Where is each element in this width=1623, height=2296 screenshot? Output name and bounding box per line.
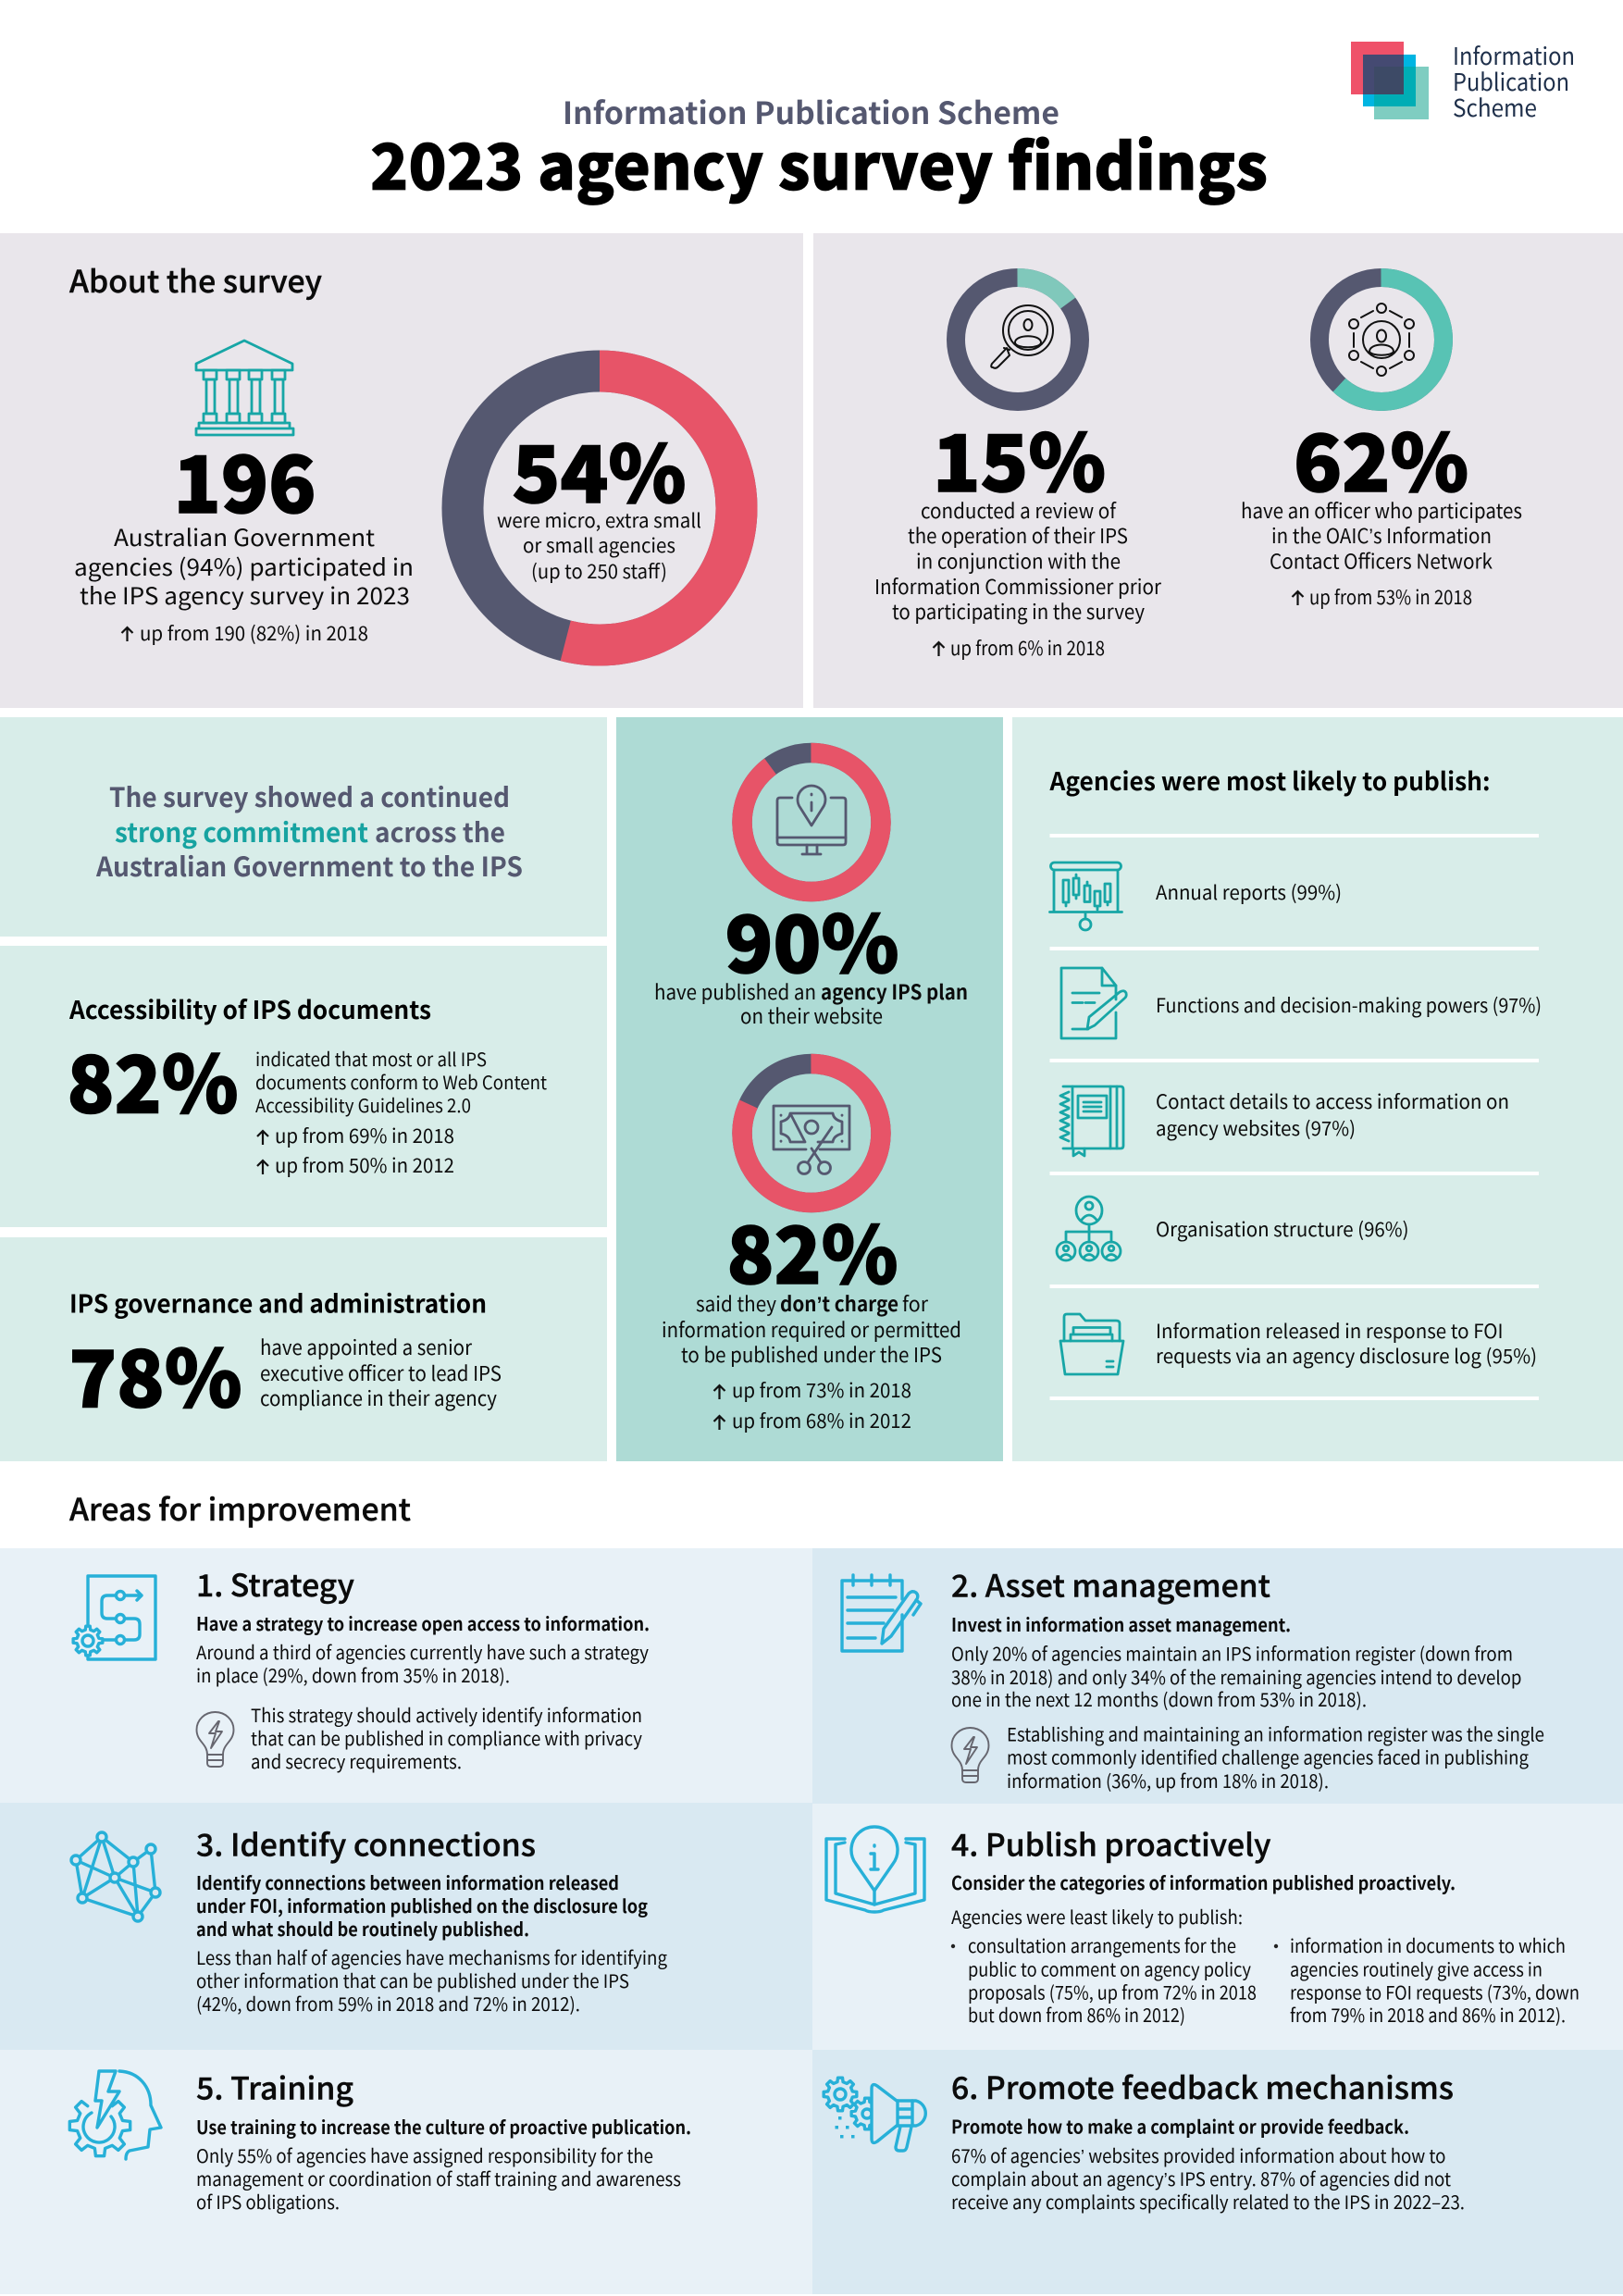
bullet list: consultation arrangements: proposals (75%, up from 72% in 2018 [968, 1979, 1257, 2004]
icon: notepad and pencil [842, 1575, 921, 1651]
stat: 15%: up from 6% in 2018 [950, 634, 1105, 662]
bullet list: information in documents: response to FOI requests (73%, down [1290, 1979, 1580, 2004]
bullet list: consultation arrangements: but down from 86% in 2012) [968, 2001, 1185, 2028]
icon: megaphone and gears [824, 2078, 925, 2151]
stat: 196 agencies: 196 [174, 422, 316, 536]
panel: 4. publish proactively: Agencies were least likely to publish: [951, 1903, 1243, 1930]
stat: 90% [654, 882, 968, 1030]
panel: 6. promote feedback mechanisms: 6. Promote feedback mechanisms [951, 2064, 1454, 2108]
panel: 3. identify connections: Less than half of agencies have mechanisms for identifying [196, 1943, 667, 1970]
panel: accessibility of IPS documents [0, 946, 607, 1227]
stat: 15%: the operation of their IPS [908, 520, 1128, 550]
icon: document and pen [1061, 968, 1126, 1038]
list item: organisation structure: Organisation structure (96%) [1156, 1215, 1408, 1243]
panel: accessibility of IPS documents: 82% [67, 1022, 239, 1136]
list item: information released: Information released in response to FOI [1156, 1317, 1503, 1345]
panel: IPS governance and administration: have appointed a senior [260, 1332, 472, 1361]
icon: magnifier with person [991, 305, 1053, 368]
icon: strategy path and gear [73, 1576, 155, 1659]
stat: 62%: have an officer who participates [1241, 495, 1522, 525]
donut chart: 82% [742, 1064, 881, 1203]
heading: areas for improvement: Areas for improvement [69, 1485, 411, 1530]
stat: 82%: to be published under the IPS [681, 1339, 942, 1369]
donut chart: 54%: (up to 250 staff) [531, 557, 667, 585]
stat: 196 agencies: Australian Government [114, 520, 376, 553]
logo: Scheme [1453, 90, 1537, 124]
stat: 82%: 82% [727, 1193, 898, 1307]
stat: 15%: in conjunction with the [916, 546, 1121, 576]
stat: 90%: have published an [654, 976, 816, 1006]
donut chart: 54%: or small agencies [523, 531, 675, 559]
panel: accessibility of IPS documents: documents conform to Web Content [255, 1068, 547, 1095]
stat: 62%: 62% [1294, 401, 1468, 515]
donut chart: 15% [956, 278, 1080, 402]
stat: 62% [1241, 401, 1522, 611]
panel: IPS governance and administration: 78% [68, 1316, 242, 1431]
stat: 15% [874, 401, 1161, 662]
icon: notebook [1060, 1086, 1123, 1156]
stat: 90%: on their website [740, 1000, 883, 1030]
stat: 82%: said they [696, 1288, 776, 1318]
panel: 1. strategy: 1. Strategy [196, 1561, 354, 1606]
list item: contact details: Contact details to access information on [1156, 1087, 1509, 1115]
panel: 3. identify connections [0, 1803, 812, 2050]
icon: light bulb [951, 1728, 988, 1782]
icon: light bulb [196, 1712, 233, 1767]
list item: annual reports: Annual reports (99%) [1156, 878, 1342, 906]
panel: 5. training: Use training to increase the culture of proactive publication. [196, 2113, 691, 2140]
icon: banknote and scissors [774, 1106, 849, 1173]
stat: 15%: to participating in the survey [892, 596, 1145, 626]
stat: 82%: up from 68% in 2012 [732, 1407, 911, 1434]
donut chart: 54%: were micro, extra small [497, 506, 701, 534]
list item: contact details [1156, 1087, 1509, 1142]
stat: 15%: conducted a review of [921, 495, 1117, 525]
panel: 6. promote feedback mechanisms: complain about an agency’s IPS entry. 87% of agencies did not [951, 2165, 1451, 2191]
stat: 82%: up from 73% in 2018 [732, 1376, 911, 1404]
icon: government building [196, 341, 293, 435]
dots [835, 2116, 855, 2138]
panel: strong commitment statement: Australian Government to the IPS [95, 846, 523, 885]
panel: 1. strategy: Around a third of agencies currently have such a strategy [196, 1638, 650, 1665]
stat: 90%: 90% [725, 882, 899, 996]
panel: 3. identify connections: under FOI, information published on the disclosure log [196, 1892, 648, 1918]
stat: 90%: agency IPS plan [821, 976, 968, 1006]
icon: network with person [1349, 304, 1414, 376]
panel: 3. identify connections: (42%, down from 59% in 2018 and 72% in 2012). [196, 1990, 580, 2017]
panel: 5. training: of IPS obligations. [196, 2188, 340, 2215]
callout: strategy: that can be published in compliance with privacy [251, 1724, 643, 1751]
list item: contact details: agency websites (97%) [1156, 1114, 1356, 1142]
callout: strategy: This strategy should actively identify information [251, 1701, 642, 1728]
donut chart: 54% [463, 371, 737, 645]
bullet list: consultation arrangements: public to comment on agency policy [968, 1955, 1252, 1982]
panel: agencies most likely to publish [1012, 717, 1623, 1461]
panel: IPS governance and administration: IPS governance and administration [69, 1285, 487, 1320]
panel: accessibility of IPS documents: Accessibility of IPS documents [68, 990, 431, 1026]
subtitle: Information Publication Scheme [563, 89, 1059, 133]
list item: information released [1156, 1317, 1537, 1370]
stat: 62%: up from 53% in 2018 [1309, 583, 1472, 611]
panel: 6. promote feedback mechanisms [812, 2050, 1623, 2294]
panel: accessibility of IPS documents: indicated that most or all IPS [255, 1045, 487, 1072]
panel: strong commitment statement [0, 717, 607, 937]
icon: presentation board [1049, 863, 1121, 930]
icon: connected network [71, 1832, 160, 1921]
stat: 15%: Information Commissioner prior [874, 571, 1161, 601]
panel: 6. promote feedback mechanisms: receive any complaints specifically related to the IPS in 2022–23. [951, 2188, 1465, 2215]
panel: 3. identify connections: other information that can be published under the IPS [196, 1967, 629, 1993]
callout: strategy [251, 1701, 643, 1774]
panel: accessibility of IPS documents: Accessibility Guidelines 2.0 [255, 1091, 471, 1118]
stat: 62%: Contact Officers Network [1270, 546, 1493, 576]
logo: Information [1453, 38, 1575, 72]
panel: 4. publish proactively [812, 1804, 1623, 2050]
panel: review and contact officers [813, 233, 1623, 708]
logo: Publication [1453, 64, 1569, 98]
bullet list: information in documents: information in documents to which [1290, 1931, 1566, 1958]
callout: information register: information (36%, up from 18% in 2018). [1007, 1767, 1329, 1793]
callout: information register: Establishing and maintaining an information register was the single [1007, 1719, 1544, 1747]
panel: IPS plan and charging [616, 717, 1003, 1461]
donut chart: 54%: 54% [513, 412, 687, 526]
callout: strategy: and secrecy requirements. [251, 1747, 462, 1774]
panel: IPS governance and administration: compliance in their agency [260, 1383, 497, 1412]
stat: 196 agencies: the IPS agency survey in 2023 [80, 578, 410, 612]
panel: 5. training: 5. Training [196, 2064, 353, 2108]
stat: 196 agencies: agencies (94%) participated in [74, 550, 414, 583]
icon: folder [1060, 1314, 1123, 1374]
stat: 82%: for [902, 1288, 928, 1318]
panel: 4. publish proactively: Consider the categories of information published proactively. [951, 1868, 1456, 1895]
stat: 62%: in the OAIC’s Information [1271, 520, 1492, 550]
heading: about the survey: About the survey [69, 257, 322, 302]
panel: 1. strategy [0, 1548, 812, 1803]
panel: 2. asset management [812, 1548, 1623, 1804]
callout: information register [1007, 1719, 1544, 1793]
list item: information released: requests via an agency disclosure log (95%) [1156, 1342, 1537, 1370]
panel: 1. strategy: in place (29%, down from 35% in 2018). [196, 1661, 510, 1688]
logo [1351, 38, 1575, 124]
list item: functions: Functions and decision-making powers (97%) [1156, 991, 1542, 1019]
panel: 2. asset management: 38% in 2018) and only 34% of the remaining agencies intend to develop [951, 1663, 1521, 1690]
panel: 3. identify connections: and what should be routinely published. [196, 1915, 529, 1942]
bullet list: information in documents [1274, 1931, 1580, 2028]
panel: 5. training: Only 55% of agencies have assigned responsibility for the [196, 2141, 653, 2168]
panel: 2. asset management: one in the next 12 months (down from 53% in 2018). [951, 1685, 1367, 1712]
panel: 4. publish proactively: 4. Publish proactively [951, 1821, 1271, 1866]
panel: 6. promote feedback mechanisms: 67% of agencies’ websites provided information about how to [951, 2141, 1445, 2168]
icon: open book with info pin [826, 1827, 924, 1912]
panel: 1. strategy: Have a strategy to increase open access to information. [196, 1609, 650, 1636]
bullet list: information in documents: agencies routinely give access in [1290, 1955, 1542, 1982]
panel: accessibility of IPS documents: up from 50% in 2012 [275, 1151, 454, 1179]
panel: IPS governance and administration [0, 1237, 607, 1461]
panel: 2. asset management: 2. Asset management [951, 1562, 1270, 1607]
panel: 3. identify connections: Identify connections between information released [196, 1868, 619, 1895]
panel: IPS governance and administration: executive officer to lead IPS [260, 1358, 502, 1387]
panel: about the survey [0, 233, 803, 708]
stat: 82% [662, 1193, 961, 1434]
panel: strong commitment statement: strong commitment [115, 812, 368, 850]
icon: monitor with info pin [777, 786, 846, 854]
icon: head, gear and lightning [69, 2071, 161, 2159]
stat: 15%: 15% [933, 401, 1106, 515]
stat: 82%: don’t charge [780, 1288, 898, 1318]
panel: 6. promote feedback mechanisms: Promote how to make a complaint or provide feedback. [951, 2112, 1409, 2140]
callout: information register: most commonly identified challenge agencies faced in publishing [1007, 1744, 1529, 1769]
bullet list: information in documents: from 79% in 2018 and 86% in 2012). [1290, 2001, 1566, 2028]
panel: 2. asset management: Invest in information asset management. [951, 1610, 1291, 1637]
panel: strong commitment statement: across the [375, 812, 505, 850]
bullet list: consultation arrangements: consultation arrangements for the [968, 1931, 1236, 1958]
stat: 82%: information required or permitted [662, 1314, 961, 1344]
panel: agencies most likely to publish: Agencies were most likely to publish: [1049, 762, 1490, 798]
panel: 5. training [0, 2050, 812, 2294]
bullet list: consultation arrangements [951, 1931, 1257, 2028]
donut chart: 62% [1319, 278, 1443, 402]
donut chart: 90% [742, 753, 881, 892]
title: 2023 agency survey findings [370, 116, 1268, 208]
stat: 196 agencies [74, 422, 414, 647]
panel: accessibility of IPS documents: up from 69% in 2018 [275, 1122, 454, 1149]
panel: 5. training: management or coordination of staff training and awareness [196, 2165, 681, 2191]
panel: strong commitment statement: The survey showed a continued [109, 776, 510, 815]
icon: organisation chart [1057, 1197, 1121, 1260]
stat: 196 agencies: up from 190 (82%) in 2018 [140, 619, 368, 647]
panel: 2. asset management: Only 20% of agencies maintain an IPS information register (down from [951, 1640, 1513, 1666]
panel: 3. identify connections: 3. Identify connections [196, 1821, 536, 1866]
